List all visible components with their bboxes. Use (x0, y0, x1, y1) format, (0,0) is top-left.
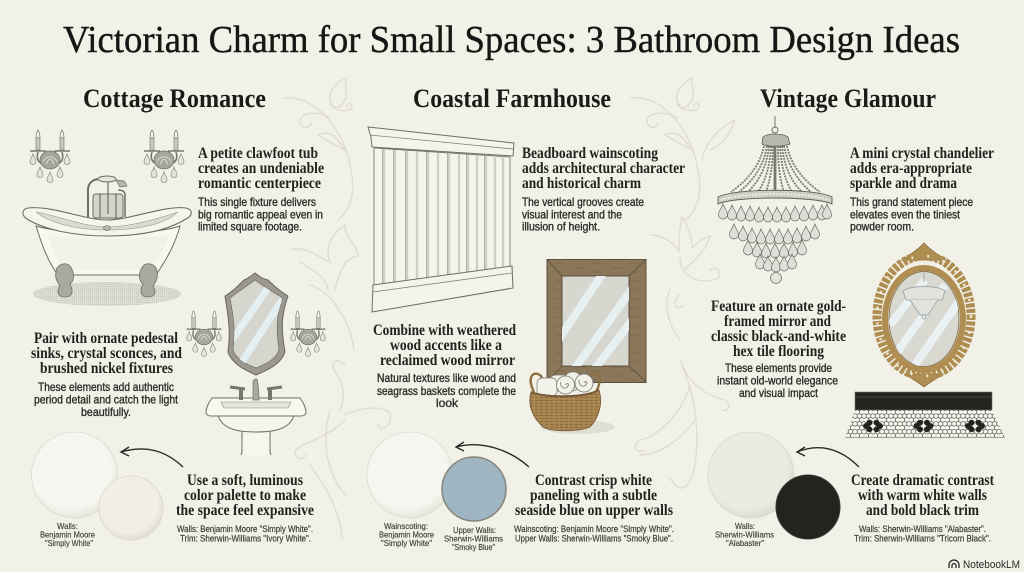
text: dramatic contrast: Trim: Sherwin-Williams "Tricorn Black". (854, 534, 991, 544)
icon: wall sconce right (144, 130, 184, 182)
decorative vine right (631, 78, 735, 488)
arrow (456, 442, 529, 467)
swatch label: Walls: (735, 521, 755, 531)
panel: Coastal Farmhouse (367, 84, 685, 552)
icon: wall sconce left (30, 130, 70, 182)
swatch label (40, 521, 95, 548)
swatch label: wainscoting: Benjamin Moore (379, 530, 434, 540)
paint swatch: Smoky Blue (442, 457, 506, 521)
text: dramatic contrast (851, 472, 995, 544)
text: dramatic contrast: and bold black trim (866, 502, 979, 519)
swatch label: Sherwin-Williams (715, 530, 774, 540)
text: gold mirror and hex tile: framed mirror and (724, 313, 831, 330)
text: beadboard: and historical charm (522, 175, 641, 192)
swatch label: Benjamin Moore (40, 530, 95, 540)
text: crisp white paneling: paneling with a subtle (530, 487, 657, 504)
swatch label: "Alabaster" (726, 538, 764, 548)
text: clawfoot tub: limited square footage. (198, 220, 302, 234)
arrow (121, 447, 183, 467)
text: chandelier: This grand statement piece (850, 195, 973, 209)
text: beadboard: visual interest and the (522, 208, 622, 222)
text: pedestal sinks: These elements add authentic (38, 380, 174, 394)
heading: Cottage Romance: Cottage Romance (83, 84, 266, 113)
text: dramatic contrast: Walls: Sherwin-Williams "Alabaster". (859, 524, 986, 535)
text: pedestal sinks: brushed nickel fixtures (40, 360, 173, 377)
heading: Coastal Farmhouse: Coastal Farmhouse (413, 84, 611, 113)
illustration: ornate silver mirror (225, 273, 288, 375)
decorative vine left (284, 78, 391, 538)
swatch label: wainscoting: Wainscoting: (384, 521, 428, 531)
text: color palette: color palette to make (184, 487, 306, 504)
illustration: black trim and hex tile floor (845, 392, 1005, 438)
text: pedestal sinks: period detail and catch the light (34, 392, 179, 406)
arrow (797, 447, 859, 467)
text: color palette: Trim: Sherwin-Williams "Ivory White". (180, 534, 311, 544)
text: pedestal sinks: beautifully. (81, 405, 131, 419)
text: gold mirror and hex tile: These elements provide (725, 361, 832, 375)
heading: Vintage Glamour: Vintage Glamour (760, 84, 936, 113)
text: clawfoot tub (198, 145, 324, 234)
text: weathered wood: look (436, 396, 459, 410)
text: chandelier: sparkle and drama (850, 175, 957, 192)
icon: small sconce right (291, 311, 325, 357)
illustration: crystal chandelier (718, 116, 832, 284)
paint swatch: Tricorn Black (776, 475, 840, 539)
text: pedestal sinks (31, 330, 182, 419)
illustration: seagrass basket with towels (530, 372, 615, 434)
text: clawfoot tub: romantic centerpiece (198, 175, 321, 192)
paint swatch: Simply White (32, 432, 118, 518)
text: dramatic contrast: with warm white walls (858, 487, 987, 504)
swatch label: wainscoting: "Simply White" (381, 538, 432, 548)
swatch label: "Simply White" (45, 538, 93, 548)
text: chandelier: powder room. (850, 220, 914, 234)
text: crisp white paneling: Wainscoting: Benjamin Moore "Simply White". (514, 524, 674, 535)
text: crisp white paneling: Upper Walls: Sherwin-Williams "Smoky Blue". (515, 534, 673, 544)
text: dramatic contrast: Create dramatic contrast (851, 472, 995, 489)
text: pedestal sinks: Pair with ornate pedestal (34, 330, 179, 347)
text: beadboard (522, 145, 685, 234)
text: gold mirror and hex tile (711, 298, 846, 400)
text: color palette: the space feel expansive (176, 502, 314, 519)
text: chandelier: adds era-appropriate (850, 160, 972, 177)
illustration: gold framed mirror (877, 243, 971, 387)
text: beadboard: illusion of height. (522, 220, 600, 234)
text: crisp white paneling: Contrast crisp white (535, 472, 652, 489)
paint swatch: Alabaster (708, 432, 794, 518)
illustration: beadboard wainscoting (368, 127, 514, 312)
text: chandelier: elevates even the tiniest (850, 208, 961, 222)
swatch label: upper walls: "Smoky Blue" (452, 542, 495, 552)
text: weathered wood: wood accents like a (390, 337, 502, 354)
paint swatch: Simply White (367, 432, 453, 518)
text: crisp white paneling: seaside blue on upper walls (515, 502, 673, 519)
text: color palette: Use a soft, luminous (187, 472, 303, 489)
text: weathered wood (373, 322, 516, 410)
swatch label: Walls: (57, 521, 78, 531)
text: crisp white paneling (514, 472, 674, 544)
illustration: reclaimed wood mirror (547, 260, 646, 382)
text: chandelier: A mini crystal chandelier (850, 145, 994, 162)
text: clawfoot tub: big romantic appeal even in (198, 208, 323, 222)
text: gold mirror and hex tile: instant old-world elegance (717, 374, 838, 388)
text: beadboard: The vertical grooves create (522, 195, 644, 209)
text: gold mirror and hex tile: Feature an ornate gold- (711, 298, 846, 315)
text: weathered wood: reclaimed wood mirror (380, 352, 515, 369)
text: gold mirror and hex tile: classic black-and-white (711, 328, 846, 345)
text: clawfoot tub: creates an undeniable (198, 160, 324, 177)
text: weathered wood: Combine with weathered (373, 322, 516, 339)
icon: small sconce left (187, 311, 221, 357)
panel: Cottage Romance (23, 84, 325, 548)
text: gold mirror and hex tile: and visual impact (739, 386, 819, 400)
swatch label (715, 521, 774, 548)
illustration: clawfoot tub (23, 176, 191, 306)
text: weathered wood: Natural textures like wood and (377, 371, 516, 385)
title: Victorian Charm for Small Spaces: 3 Bathroom Design Ideas (63, 19, 960, 61)
text: color palette (176, 472, 314, 544)
text: pedestal sinks: sinks, crystal sconces, and (31, 345, 182, 362)
text: gold mirror and hex tile: hex tile flooring (733, 343, 824, 360)
swatch label: upper walls: Upper Walls: (453, 525, 496, 535)
illustration: pedestal sink (206, 379, 306, 455)
text: color palette: Walls: Benjamin Moore "Simply White". (177, 524, 313, 535)
panel: Vintage Glamour (708, 84, 1005, 548)
swatch label: upper walls: Sherwin-Williams (444, 534, 503, 544)
text: chandelier (850, 145, 994, 234)
text: beadboard: adds architectural character (522, 160, 685, 177)
text: clawfoot tub: A petite clawfoot tub (198, 145, 318, 162)
text: clawfoot tub: This single fixture delivers (198, 195, 316, 209)
text: beadboard: Beadboard wainscoting (522, 145, 658, 162)
paint swatch: Ivory White (99, 476, 163, 540)
swatch label: wainscoting (379, 521, 434, 548)
text: weathered wood: seagrass baskets complete the (377, 384, 516, 398)
logo: NotebookLM: NotebookLM (963, 559, 1020, 571)
swatch label: upper walls (444, 525, 503, 552)
